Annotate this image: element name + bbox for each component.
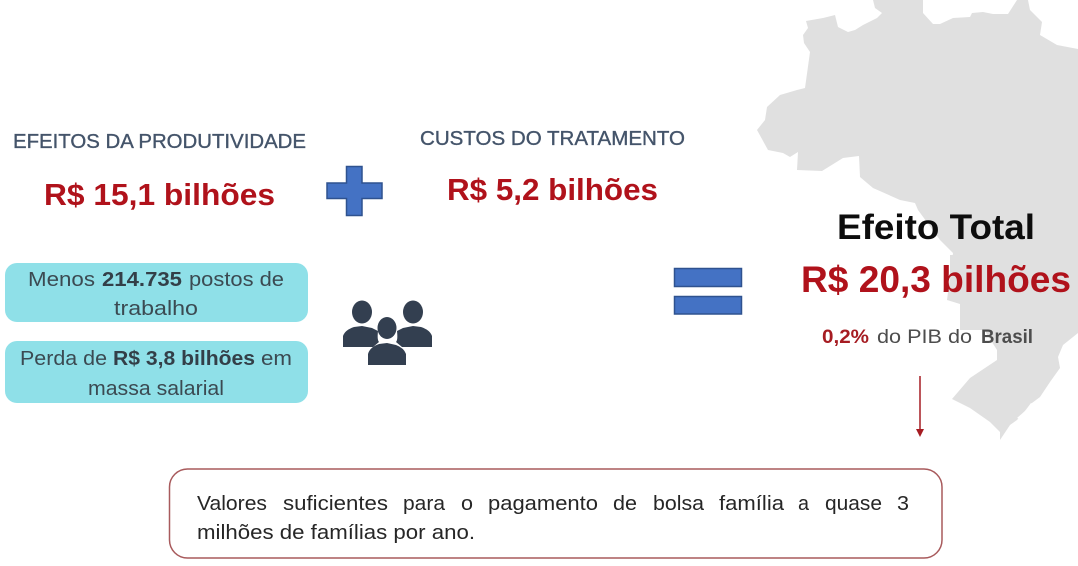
callout: bolsa família: [170, 469, 942, 558]
callout: bolsa família: 3: [897, 492, 909, 515]
text: share of GDP: Brasil: [981, 327, 1033, 348]
callout: bolsa família: quase: [825, 492, 882, 515]
title: efeito total: Efeito Total: [837, 208, 1035, 247]
callout: massa salarial: massa salarial: [88, 377, 224, 400]
callout: bolsa família: a: [798, 492, 810, 515]
map of Brazil: [757, 0, 1078, 440]
arrow: down: [916, 376, 924, 437]
callout: bolsa família: o: [461, 492, 473, 515]
text: share of GDP: [822, 327, 1033, 348]
text: share of GDP: do PIB do: [877, 327, 972, 348]
value: R$ 20,3 bilhões: R$ 20,3 bilhões: [801, 259, 1071, 300]
callout: massa salarial: R$ 3,8 bilhões: [113, 347, 255, 370]
callout: bolsa família: de: [613, 492, 637, 515]
callout: postos de trabalho: postos de: [189, 268, 284, 291]
callout: postos de trabalho: [5, 263, 308, 322]
callout: massa salarial: Perda de: [20, 347, 107, 370]
callout: bolsa família: pagamento: [488, 492, 598, 515]
callout: postos de trabalho: trabalho: [114, 297, 198, 320]
callout: massa salarial: em: [261, 347, 292, 370]
callout: bolsa família: bolsa: [653, 492, 705, 515]
value: R$ 5,2 bilhões: R$ 5,2 bilhões: [447, 172, 658, 207]
icon: group of people: [343, 300, 432, 365]
text: share of GDP: 0,2%: [822, 327, 869, 348]
callout: bolsa família: Valores: [197, 492, 267, 515]
callout: massa salarial: [5, 341, 308, 403]
icon: plus sign: [327, 166, 382, 216]
callout: postos de trabalho: 214.735: [102, 268, 182, 291]
heading: efeitos da produtividade: EFEITOS DA PRODUTIVIDADE: [13, 131, 306, 153]
heading: custos do tratamento: CUSTOS DO TRATAMENTO: [420, 128, 685, 150]
callout: bolsa família: família: [719, 492, 785, 515]
callout: bolsa família: suficientes: [283, 492, 388, 515]
value: R$ 15,1 bilhões: R$ 15,1 bilhões: [44, 177, 275, 212]
icon: equals sign: [674, 268, 742, 314]
callout: bolsa família: milhões de famílias por ano.: [197, 521, 475, 544]
callout: bolsa família: para: [403, 492, 446, 515]
callout: postos de trabalho: Menos: [28, 268, 95, 291]
